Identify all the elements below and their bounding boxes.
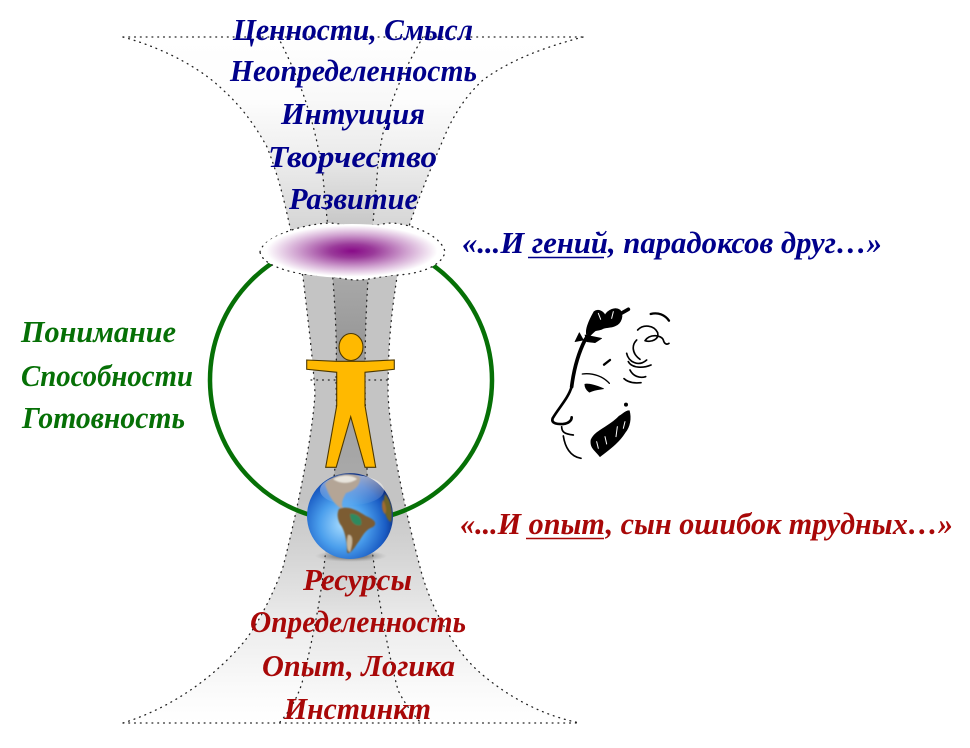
left labels: Понимание xyxy=(20,314,176,349)
top labels xyxy=(229,12,477,216)
left labels: Готовность xyxy=(21,400,185,435)
bottom labels: Инстинкт xyxy=(283,691,431,726)
left labels xyxy=(20,314,193,435)
portrait sketch xyxy=(552,309,669,458)
bottom labels: Опыт, Логика xyxy=(262,648,455,683)
top labels: Творчество xyxy=(268,139,437,174)
bottom labels xyxy=(250,562,466,726)
person figure xyxy=(307,334,394,467)
funnel: dotted outlines xyxy=(123,37,583,723)
funnel: outer column xyxy=(123,37,583,723)
left labels: Способности xyxy=(21,358,193,393)
funnel: inner column xyxy=(278,37,423,722)
bottom labels: Ресурсы xyxy=(302,562,412,597)
top labels: Неопределенность xyxy=(229,53,477,88)
top labels: Интуиция xyxy=(280,96,425,131)
green circle xyxy=(210,239,492,521)
quote: genius: «...И гений, парадоксов друг…» xyxy=(462,225,882,260)
globe xyxy=(307,473,393,562)
purple cloud xyxy=(260,223,445,280)
bottom labels: Определенность xyxy=(250,604,466,639)
top labels: Ценности, Смысл xyxy=(232,12,473,47)
quote: experience: «...И опыт, сын ошибок трудных…» xyxy=(460,506,953,541)
top labels: Развитие xyxy=(288,181,418,216)
